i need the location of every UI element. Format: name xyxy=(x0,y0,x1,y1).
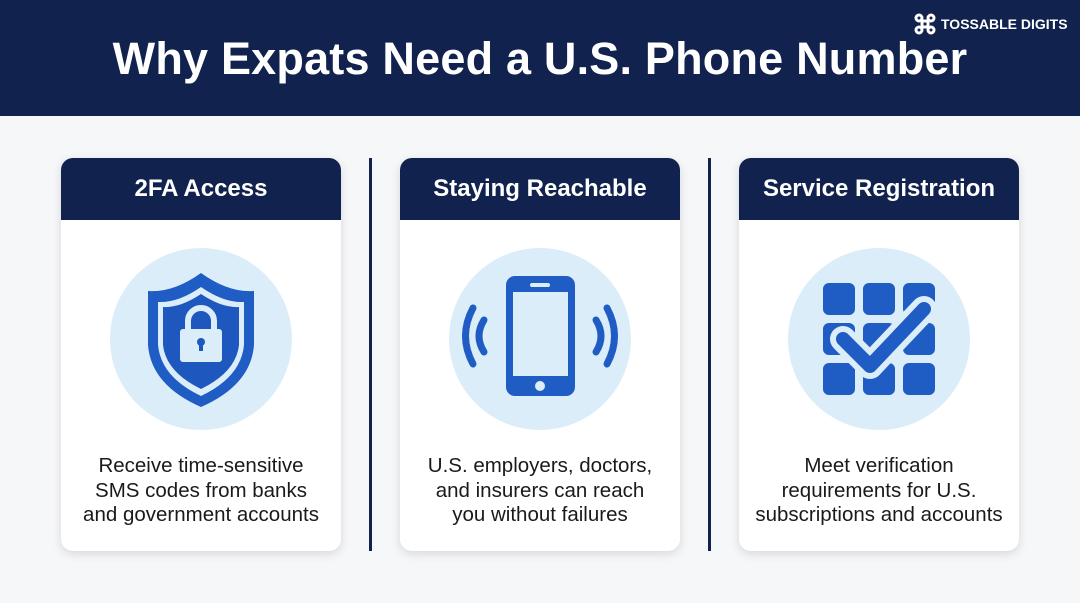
title: Why Expats Need a U.S. Phone Number xyxy=(113,33,967,84)
description: you without failures xyxy=(452,503,628,526)
heading xyxy=(400,158,680,220)
heading xyxy=(61,158,341,220)
panel: 2FA Access xyxy=(61,158,341,551)
divider xyxy=(369,158,372,551)
description: SMS codes from banks xyxy=(95,478,307,502)
heading: Service Registration xyxy=(763,175,995,202)
header bar xyxy=(0,0,1080,116)
icon: shield lock xyxy=(110,248,292,430)
icon: phone xyxy=(449,248,631,430)
panel: Staying Reachable xyxy=(400,158,680,551)
heading xyxy=(739,158,1019,220)
divider xyxy=(708,158,711,551)
description xyxy=(755,454,1003,526)
description: Receive time-sensitive xyxy=(98,454,304,477)
description: requirements for U.S. xyxy=(782,478,976,502)
description xyxy=(83,454,319,526)
panel: Service Registration xyxy=(739,158,1019,551)
description: and insurers can reach xyxy=(436,478,644,502)
heading: Staying Reachable xyxy=(433,175,647,202)
logo xyxy=(914,14,1068,34)
description: subscriptions and accounts xyxy=(755,503,1003,526)
description: U.S. employers, doctors, xyxy=(428,454,652,477)
logo: TOSSABLE DIGITS xyxy=(941,16,1068,32)
description: and government accounts xyxy=(83,503,319,526)
icon: grid check xyxy=(788,248,970,430)
heading: 2FA Access xyxy=(134,175,267,202)
description: Meet verification xyxy=(804,454,954,477)
description xyxy=(428,454,652,526)
